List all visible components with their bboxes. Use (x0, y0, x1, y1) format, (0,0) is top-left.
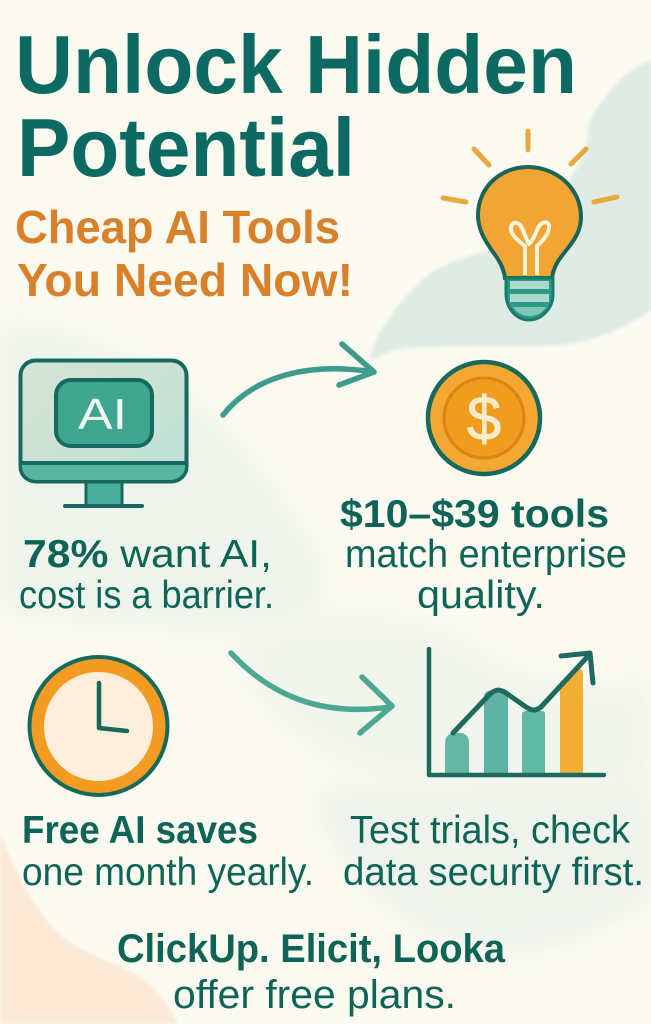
arrow: clock to chart (231, 653, 392, 733)
text: 78% want AI: 78% want AI, (23, 533, 272, 576)
text: 78% want AI (19, 533, 274, 617)
title: Unlock Hidden (15, 18, 577, 111)
text: test trials (343, 809, 644, 894)
text: free AI saves: one month yearly. (22, 851, 314, 894)
icon: monitor with AI: AI (78, 390, 127, 439)
title: Potential (17, 101, 355, 194)
title (15, 18, 577, 194)
icon: dollar coin: $ (467, 385, 501, 454)
text: test trials: data security first. (343, 851, 644, 894)
icon: monitor with AI (20, 360, 186, 506)
text: free plans: offer free plans. (173, 973, 456, 1017)
text: free AI saves (22, 809, 314, 894)
icon: light bulb (443, 131, 617, 320)
subtitle: You Need Now! (17, 254, 353, 306)
icon: bar chart (429, 649, 604, 775)
icon: dollar coin (428, 362, 540, 474)
text: free plans: ClickUp. Elicit, Looka (117, 927, 506, 971)
text: tools pricing (340, 493, 627, 617)
subtitle: Cheap AI Tools (15, 201, 340, 253)
arrow: monitor to coin (223, 344, 374, 415)
subtitle (15, 201, 353, 306)
text: free AI saves: Free AI saves (22, 809, 258, 852)
text: 78% want AI: cost is a barrier. (19, 574, 274, 617)
text: free plans (117, 927, 506, 1017)
text: test trials: Test trials, check (350, 809, 630, 852)
icon: clock (30, 657, 168, 795)
text: tools pricing: quality. (417, 574, 545, 617)
text: tools pricing: match enterprise (345, 533, 627, 576)
text: tools pricing: $10–$39 tools (340, 493, 609, 536)
